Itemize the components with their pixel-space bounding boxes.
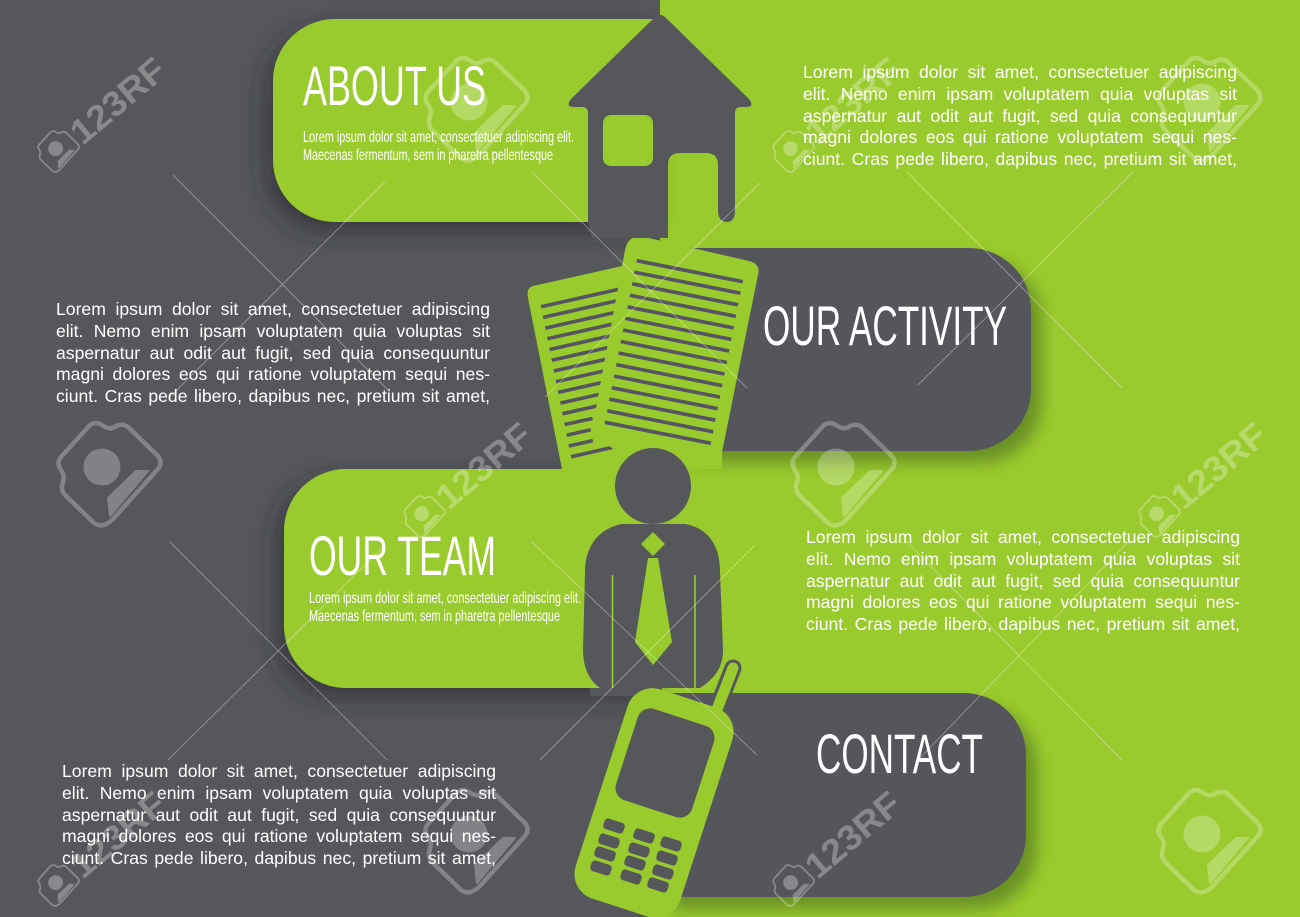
- text block: about us body: Lorem ipsum dolor sit amet, consectetuer adipiscing: [803, 62, 1237, 82]
- head: [615, 448, 691, 524]
- heading: about us: ABOUT US: [303, 54, 486, 117]
- icon: house: [569, 15, 751, 238]
- panel: our team: [284, 469, 660, 688]
- strip under team panel: [590, 688, 662, 696]
- watermark: 123RF logos: 123RF: [798, 784, 909, 886]
- text block: contact body: elit. Nemo enim ipsam voluptatem quia voluptas sit: [62, 783, 496, 803]
- text block: about us body: [803, 62, 1237, 169]
- text block: our activity body: magni dolores eos qui ratione voluptatem sequi nes-: [56, 364, 490, 384]
- text block: our team body: aspernatur aut odit aut fugit, sed quia consequuntur: [806, 571, 1240, 591]
- heading: contact: CONTACT: [816, 722, 983, 785]
- watermark: 123RF logos: 123RF: [1164, 415, 1275, 517]
- text block: about us body: ciunt. Cras pede libero, dapibus nec, pretium sit amet,: [803, 149, 1237, 169]
- panel: contact: [660, 693, 1026, 897]
- text block: contact body: magni dolores eos qui ratione voluptatem sequi nes-: [62, 826, 496, 846]
- text block: our team body: elit. Nemo enim ipsam voluptatem quia voluptas sit: [806, 549, 1240, 569]
- watermark: 123RF logos: 123RF: [798, 50, 909, 152]
- tie: [635, 532, 672, 665]
- back page: [528, 262, 640, 469]
- front page: [592, 236, 759, 469]
- watermark: 123RF logos: 123RF: [429, 415, 540, 517]
- heading: our activity: OUR ACTIVITY: [763, 294, 1007, 357]
- icon: mobile phone: [568, 668, 740, 917]
- text block: about us body: elit. Nemo enim ipsam voluptatem quia voluptas sit: [803, 84, 1237, 104]
- heading: our team: OUR TEAM: [309, 524, 496, 587]
- text block: our activity body: aspernatur aut odit aut fugit, sed quia consequuntur: [56, 343, 490, 363]
- text block: our activity body: [56, 299, 490, 406]
- antenna: [718, 668, 733, 706]
- panel: our activity: [680, 248, 1031, 451]
- text block: about us body: magni dolores eos qui ratione voluptatem sequi nes-: [803, 127, 1237, 147]
- text: our team description: [309, 590, 581, 625]
- text block: our team body: [806, 527, 1240, 634]
- keypad: [589, 818, 683, 893]
- text block: our team body: ciunt. Cras pede libero, dapibus nec, pretium sit amet,: [806, 614, 1240, 634]
- house window: [603, 115, 653, 166]
- text block: our activity body: Lorem ipsum dolor sit amet, consectetuer adipiscing: [56, 299, 490, 319]
- text: about us description: [303, 129, 574, 164]
- text block: our activity body: elit. Nemo enim ipsam voluptatem quia voluptas sit: [56, 321, 490, 341]
- torso: [583, 524, 723, 688]
- text block: our team body: Lorem ipsum dolor sit amet, consectetuer adipiscing: [806, 527, 1240, 547]
- text block: about us body: aspernatur aut odit aut fugit, sed quia consequuntur: [803, 106, 1237, 126]
- watermark: 123RF logos: 123RF: [63, 50, 174, 152]
- watermark: diagonal hairlines: [168, 172, 1133, 760]
- text block: contact body: ciunt. Cras pede libero, dapibus nec, pretium sit amet,: [62, 848, 496, 868]
- text block: contact body: [62, 761, 496, 868]
- phone body: [568, 681, 740, 917]
- panel: about us: [273, 19, 660, 222]
- front page lines: [605, 261, 743, 443]
- text block: contact body: aspernatur aut odit aut fugit, sed quia consequuntur: [62, 805, 496, 825]
- arm separators: [612, 575, 695, 688]
- text block: our team body: magni dolores eos qui ratione voluptatem sequi nes-: [806, 592, 1240, 612]
- phone screen: [612, 705, 718, 821]
- text: our team description: Lorem ipsum dolor sit amet, consectetuer adipiscing elit.: [309, 590, 581, 607]
- text block: contact body: Lorem ipsum dolor sit amet, consectetuer adipiscing: [62, 761, 496, 781]
- text: our team description: Maecenas fermentum, sem in pharetra pellentesque: [309, 608, 560, 625]
- watermark: 123RF logos: 123RF: [63, 784, 174, 886]
- icon: business person: [583, 448, 723, 688]
- text: about us description: Lorem ipsum dolor sit amet, consectetuer adipiscing elit.: [303, 129, 574, 146]
- icon: documents: [528, 236, 759, 469]
- text block: our activity body: ciunt. Cras pede libero, dapibus nec, pretium sit amet,: [56, 386, 490, 406]
- text: about us description: Maecenas fermentum, sem in pharetra pellentesque: [303, 147, 553, 164]
- back page lines: [541, 289, 642, 457]
